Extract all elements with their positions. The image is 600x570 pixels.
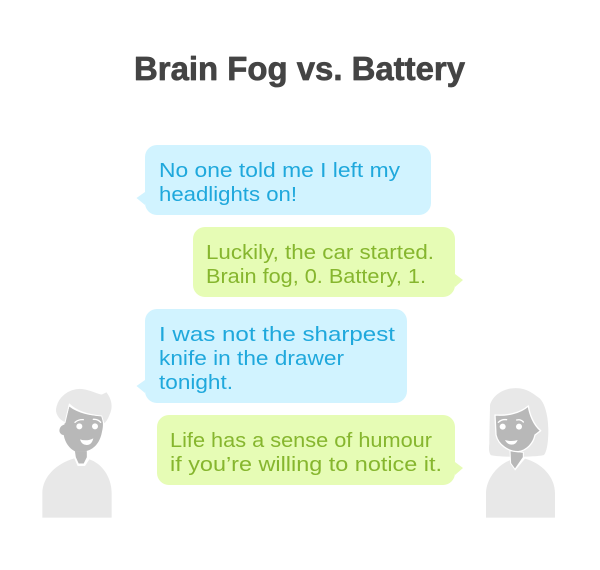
speech bubble 3: knife in the drawer <box>159 348 344 370</box>
speech bubble 1: headlights on! <box>159 184 297 206</box>
speech bubble 2: Luckily, the car started. <box>206 242 434 264</box>
icon: woman avatar <box>486 388 555 518</box>
icon: man avatar <box>42 388 112 518</box>
speech bubble 3 <box>136 309 407 403</box>
speech bubble 3: tonight. <box>159 372 233 394</box>
speech bubble 1: No one told me I left my <box>159 160 400 182</box>
speech bubble 3: I was not the sharpest <box>159 324 396 346</box>
speech bubble 4: Life has a sense of humour <box>170 430 432 452</box>
speech bubble 2 <box>193 227 463 297</box>
speech bubble 4: if you’re willing to notice it. <box>170 454 442 476</box>
speech bubble 4 <box>157 415 463 485</box>
speech bubble 1 <box>136 145 431 215</box>
speech bubble 2: Brain fog, 0. Battery, 1. <box>206 266 426 288</box>
title: Brain Fog vs. Battery <box>134 50 466 87</box>
